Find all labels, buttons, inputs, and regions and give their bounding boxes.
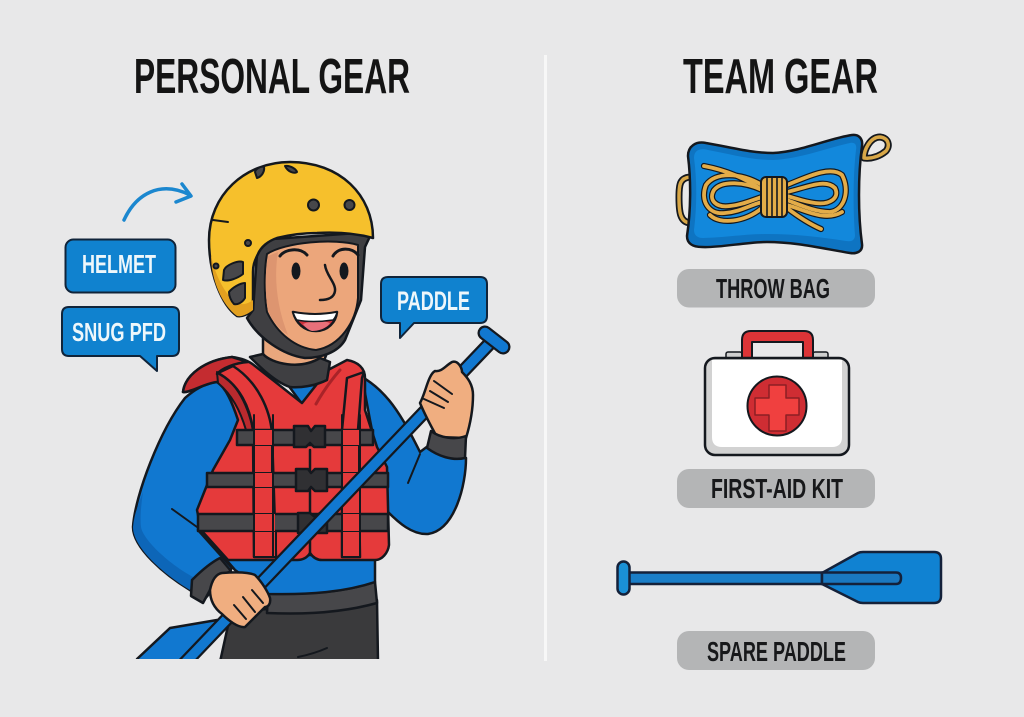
waistband [267, 582, 377, 614]
kit case [705, 358, 849, 455]
callout: paddle: PADDLE [397, 286, 470, 316]
nose [320, 265, 335, 300]
heading: personal gear: PERSONAL GEAR [134, 50, 410, 104]
callout: helmet: HELMET [82, 249, 156, 279]
mouth [293, 312, 337, 331]
neck [262, 338, 328, 364]
callout: snug pfd [62, 307, 179, 371]
bag highlight [694, 143, 856, 241]
left arm [133, 381, 240, 602]
icon: first-aid kit [705, 331, 849, 455]
left cuff [191, 558, 231, 603]
helmet liner and chin strap [247, 232, 372, 358]
face [265, 242, 358, 350]
label: spare paddle [677, 631, 875, 670]
icon: throw bag [679, 135, 888, 253]
undershirt [288, 386, 314, 402]
torso shirt [222, 555, 375, 594]
vest straps [198, 430, 388, 531]
buckles [294, 426, 327, 533]
label: throw bag [677, 269, 875, 308]
collar [250, 354, 330, 387]
life vest [183, 357, 389, 560]
label: first-aid kit: FIRST-AID KIT [711, 473, 843, 504]
figure: rafter with helmet, life vest and paddle [133, 162, 503, 666]
icon: spare paddle [618, 552, 941, 603]
coiled rope [704, 166, 846, 229]
cross badge [748, 376, 806, 436]
pants [220, 600, 378, 662]
bag loop [864, 137, 888, 158]
brows [280, 249, 358, 256]
label: throw bag: THROW BAG [716, 273, 830, 304]
callout: snug pfd: SNUG PFD [72, 317, 166, 347]
face shading [266, 252, 288, 335]
kit handle [742, 331, 813, 358]
upper cuff [427, 431, 466, 459]
bag handle [679, 177, 690, 223]
arrow: toward helmet [124, 184, 191, 220]
left arm shading [133, 492, 195, 590]
label: first-aid kit [677, 469, 875, 508]
lower hand [210, 572, 270, 627]
eyes [292, 262, 348, 280]
helmet [209, 162, 373, 316]
bag body [687, 135, 862, 253]
callout: paddle [381, 277, 487, 338]
label: spare paddle: SPARE PADDLE [707, 636, 846, 667]
heading: team gear: TEAM GEAR [683, 50, 878, 104]
upper hand [420, 362, 473, 438]
callout: helmet [66, 240, 176, 292]
right arm [362, 377, 466, 534]
paddle shaft and blade [137, 333, 503, 666]
